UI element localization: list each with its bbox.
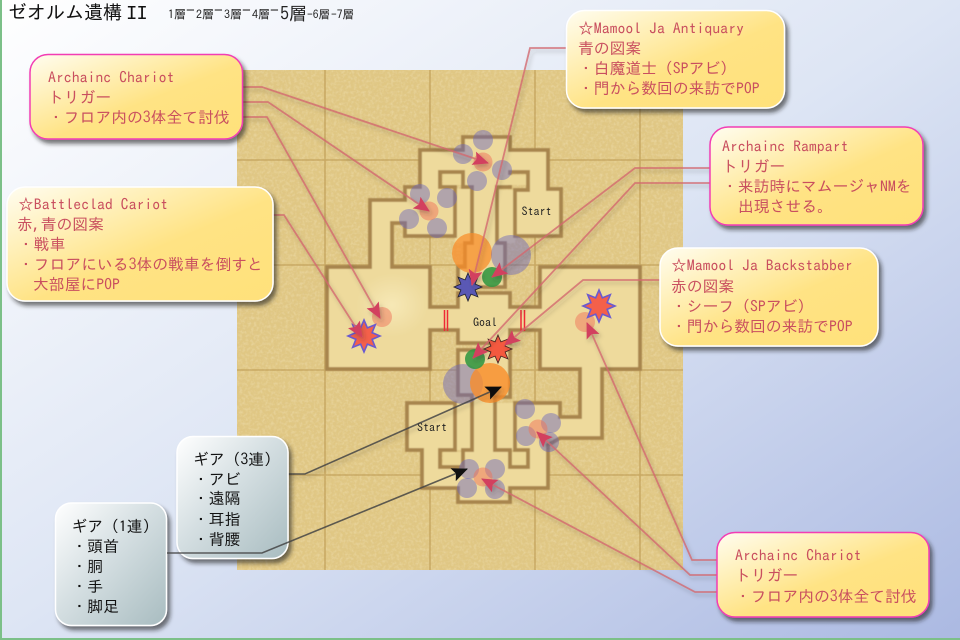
chariot right room <box>575 312 595 332</box>
callout: Mamool Ja Backstabber <box>660 248 878 346</box>
spawn markers <box>348 130 615 499</box>
floor navigation: − <box>214 2 223 19</box>
callout: Mamool Ja Antiquary: 青の図案 <box>578 40 641 56</box>
star: battleclad right <box>583 290 615 322</box>
callout: gear 1 <box>56 503 166 626</box>
label: goal: Goal <box>473 316 497 328</box>
door: right <box>521 310 524 331</box>
arrow: rampart upper <box>492 168 710 277</box>
arrow: chariot to bottom group <box>482 479 717 592</box>
rampart lower <box>465 349 485 369</box>
star: backstabber <box>484 335 512 363</box>
callout: gear 1: ・胴 <box>72 558 103 574</box>
top chariot group <box>453 130 512 191</box>
floor navigation: 4層 <box>252 8 270 20</box>
callout: Archainc Rampart: Archainc Rampart <box>722 138 848 154</box>
callout: gear 1: ・手 <box>72 578 103 594</box>
callout: gear 1: ・脚足 <box>72 598 119 614</box>
callout: gear 3 <box>177 436 288 558</box>
callout: gear 1: ギア（1連） <box>72 518 158 534</box>
floor navigation: 5層 <box>280 5 307 23</box>
callout: Archainc Chariot bottom right: ・フロア内の3体全て討伐 <box>735 588 917 604</box>
callout: Mamool Ja Backstabber: 赤の図案 <box>671 278 734 294</box>
door: left <box>444 310 448 331</box>
arrow: chariot to left room <box>243 117 380 318</box>
floor navigation <box>168 2 354 23</box>
callout: Mamool Ja Antiquary: ・門から数回の来訪でPOP <box>578 80 760 96</box>
callout: gear 3: ・遠隔 <box>193 490 240 506</box>
callout: gear 3: ・アビ <box>193 471 241 487</box>
arrow: chariot to right room <box>587 323 717 560</box>
star: antiquary <box>454 273 482 301</box>
callout: Archainc Chariot top left: トリガー <box>48 89 111 105</box>
callout: Archainc Rampart: トリガー <box>722 158 785 174</box>
callout: Mamool Ja Backstabber: ・シーフ（SPアビ） <box>671 298 813 314</box>
callout: Archainc Chariot bottom right <box>717 532 929 617</box>
floor navigation: − <box>242 2 251 19</box>
arrow: chariot to top group <box>243 87 488 163</box>
callout: Archainc Rampart <box>710 127 923 225</box>
callout: Battleclad Cariot: ☆Battleclad Cariot <box>18 196 168 212</box>
title: II <box>126 3 147 25</box>
callout: Archainc Chariot top left: Archainc Chariot <box>48 69 174 85</box>
floor navigation: 2層 <box>196 8 214 20</box>
label: start lower: Start <box>417 422 447 434</box>
callout: Battleclad Cariot: ・フロアにいる3体の戦車を倒すと <box>18 256 263 272</box>
floor navigation: − <box>270 2 279 19</box>
gear 3 markers upper <box>452 233 531 275</box>
arrow: backstabber <box>505 280 660 345</box>
callout: gear 3: ・耳指 <box>193 511 240 527</box>
callout: Battleclad Cariot: 赤,青の図案 <box>17 216 104 232</box>
callout: Battleclad Cariot: 大部屋にPOP <box>33 276 120 292</box>
floor plan <box>327 137 640 502</box>
callout: Archainc Chariot top left: ・フロア内の3体全て討伐 <box>48 109 230 125</box>
callout: Battleclad Cariot: ・戦車 <box>18 236 65 252</box>
arrow: chariot to lower right group <box>537 432 717 575</box>
floor navigation: 3層 <box>224 8 242 20</box>
gear markers lower <box>443 363 510 404</box>
arrow: gear 1 <box>167 469 467 553</box>
floor navigation: -6層 <box>307 10 330 20</box>
floor navigation: -7層 <box>331 10 354 20</box>
callout: gear 1: ・頭首 <box>72 538 119 554</box>
rampart upper <box>482 267 502 287</box>
label: start upper: Start <box>522 206 552 218</box>
star: battleclad left <box>348 320 380 352</box>
lower right chariot group <box>515 399 561 452</box>
callout: Battleclad Cariot <box>7 187 273 301</box>
arrow: antiquary <box>472 48 566 285</box>
callout: Archainc Chariot bottom right: Archainc Chariot <box>735 547 861 563</box>
floor navigation: 1層 <box>168 8 186 20</box>
arrow: battleclad <box>273 215 362 337</box>
arrow: rampart lower <box>473 183 710 358</box>
callout: Mamool Ja Antiquary: ・白魔道士（SPアビ） <box>578 60 736 76</box>
callout: Mamool Ja Backstabber: ☆Mamool Ja Backstabber <box>671 257 853 273</box>
floor navigation: − <box>186 2 195 19</box>
leader arrows <box>243 48 717 592</box>
callout: Mamool Ja Antiquary <box>566 10 784 108</box>
bottom chariot group <box>457 459 505 499</box>
chariot left room <box>372 307 392 327</box>
map <box>237 70 683 570</box>
callout: gear 3: ギア（3連） <box>193 451 280 467</box>
arrow: gear 3 <box>288 387 501 474</box>
arrow: chariot to left group <box>243 102 429 211</box>
left chariot group <box>399 184 457 238</box>
callout: Mamool Ja Antiquary: ☆Mamool Ja Antiquary <box>578 20 744 36</box>
title: ゼオルム遺構 <box>8 3 122 22</box>
callout: Archainc Rampart: ・来訪時にマムージャNMを <box>722 178 912 194</box>
callout: Archainc Rampart: 出現させる。 <box>738 198 833 214</box>
callout: Mamool Ja Backstabber: ・門から数回の来訪でPOP <box>671 318 853 334</box>
callout: gear 3: ・背腰 <box>193 531 240 547</box>
callout: Archainc Chariot bottom right: トリガー <box>735 567 798 583</box>
callout: Archainc Chariot top left <box>30 54 242 139</box>
